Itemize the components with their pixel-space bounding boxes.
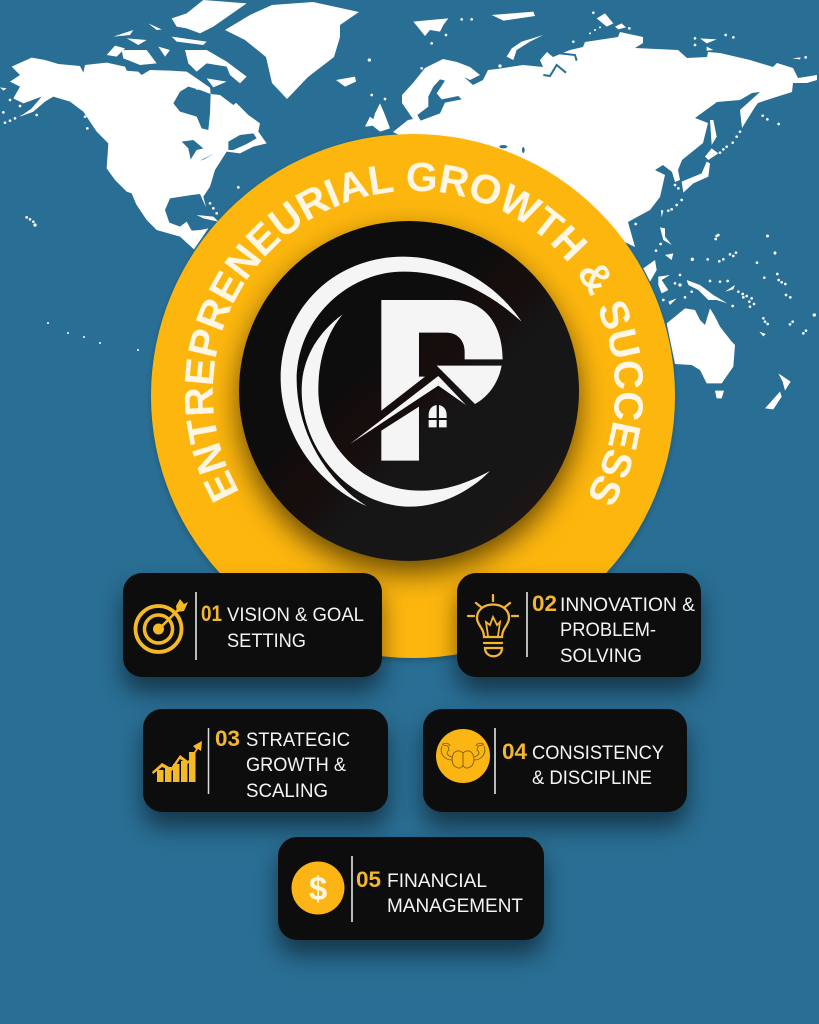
logo: window: [429, 405, 447, 427]
card 03 text: [215, 726, 350, 802]
map: East Asia islands: [572, 11, 807, 255]
card 02 text: SOLVING: [560, 645, 642, 667]
logo: P bowl: [437, 366, 502, 404]
map: Oceania: [634, 223, 816, 409]
card 03 text: 03: [215, 726, 240, 751]
card 05: [278, 837, 544, 940]
card 03 text: STRATEGIC: [246, 729, 350, 751]
map: Greenland: [225, 2, 359, 99]
icon: light bulb: [468, 595, 518, 656]
card 01: [123, 573, 382, 677]
card 03 text: SCALING: [246, 780, 328, 802]
logo: inner swoosh: [302, 314, 490, 507]
card 01 text: SETTING: [227, 630, 306, 652]
curved title: ENTREPRENEURIAL GROWTH & SUCCESS: [184, 162, 644, 504]
card 04 text: & DISCIPLINE: [532, 767, 652, 789]
card 05 text: [356, 867, 523, 917]
card 05 text: MANAGEMENT: [387, 895, 523, 917]
logo: outer swoosh: [281, 257, 522, 506]
logo: roof: [350, 376, 466, 444]
card 01 text: VISION & GOAL: [227, 604, 364, 626]
card 03 text: GROWTH &: [246, 754, 346, 776]
icon: dollar coin: $: [309, 870, 327, 907]
map: Eurasia: [393, 32, 817, 247]
world map: [0, 0, 817, 409]
card 05 text: FINANCIAL: [387, 870, 487, 892]
map: Europe islands: [336, 12, 543, 132]
card 04 text: 04: [502, 739, 528, 764]
card 05 text: 05: [356, 867, 381, 892]
map: Baltic and Arctic inlets: [417, 53, 577, 153]
icon: strong brain: [436, 729, 490, 783]
card 03: [143, 709, 388, 812]
card 02: [457, 573, 701, 677]
card 04 text: [502, 739, 664, 789]
card 02 text: INNOVATION &: [560, 594, 695, 616]
logo: letter P: [381, 300, 503, 411]
icon: target: [136, 599, 188, 652]
black logo disc: [239, 221, 579, 561]
logo: P stem: [381, 407, 419, 461]
map: North America and Arctic: [0, 0, 267, 351]
card 04: [423, 709, 687, 812]
icon: growth chart: [152, 741, 202, 782]
card 02 text: PROBLEM-: [560, 619, 656, 641]
card 04 text: CONSISTENCY: [532, 742, 664, 764]
card 02 text: [532, 591, 695, 667]
yellow ring circle: [151, 134, 675, 658]
card 01 text: 01: [201, 601, 222, 626]
logo: [281, 257, 522, 507]
icon: dollar coin: [292, 862, 344, 914]
card 01 text: [201, 601, 364, 652]
card 02 text: 02: [532, 591, 557, 616]
